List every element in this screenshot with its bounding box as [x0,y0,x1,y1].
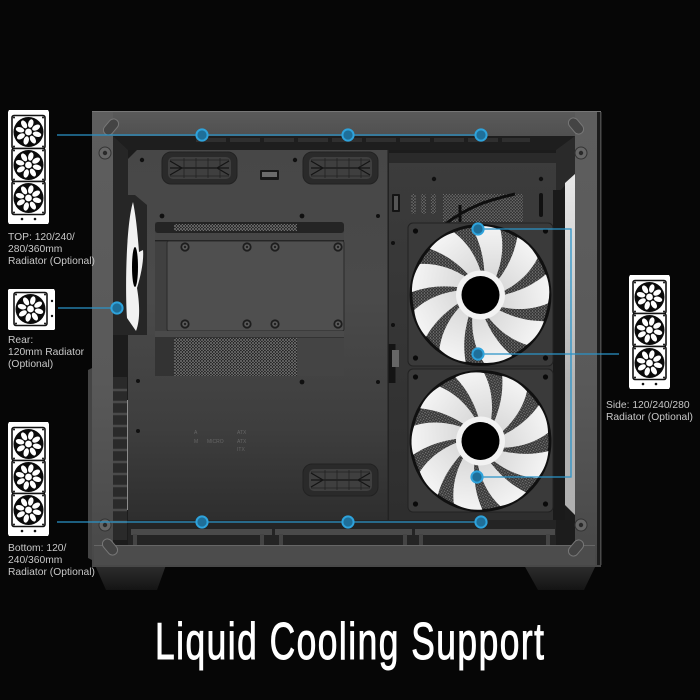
bottom vent [303,464,378,496]
top vents [162,152,378,184]
label: top radiator: 280/360mm [8,244,62,255]
case feet [95,565,596,590]
callout line: rear [58,302,123,314]
bottom fans [128,520,556,545]
callout line: bottom [57,516,487,528]
icon: rear radiator [8,289,55,330]
tray screw holes [136,158,380,433]
size markings: ATX [237,439,247,445]
callout line: top [57,129,487,141]
side fan bottom [394,355,568,528]
label: bottom radiator: Bottom: 120/ [8,543,67,554]
label: side radiator: Side: 120/240/280 [606,400,690,411]
label: bottom radiator: 240/360mm [8,555,62,566]
size markings [194,430,247,453]
icon: bottom radiator [8,422,49,536]
label: bottom radiator: Radiator (Optional) [8,567,95,578]
label: rear radiator: (Optional) [8,359,53,370]
side fan top [408,223,553,367]
size markings: ATX [237,430,247,436]
size markings: MICRO [207,439,224,445]
case corner hardware [99,116,587,558]
glass side reflection [565,174,575,515]
rear compartment [389,153,565,520]
small port [260,170,279,180]
callout bracket: side fans [471,223,571,483]
label: rear radiator: 120mm Radiator [8,347,85,358]
size markings: ITX [237,447,245,453]
computer case [88,111,602,590]
size markings: M [194,439,198,445]
icon: top radiator [8,110,49,224]
icon: side radiator [629,275,670,389]
motherboard cutout [155,222,344,376]
case interior depth [113,136,575,545]
label: rear radiator: Rear: [8,335,33,346]
case outer frame [88,111,602,567]
size markings: A [194,430,198,436]
label: side radiator: Radiator (Optional) [606,412,693,423]
label: top radiator: TOP: 120/240/ [8,232,75,243]
label: top radiator: Radiator (Optional) [8,256,95,267]
callout line: side [472,348,619,360]
rear fan [113,195,147,335]
title: Liquid Cooling Support [155,613,544,671]
motherboard tray [128,150,388,520]
